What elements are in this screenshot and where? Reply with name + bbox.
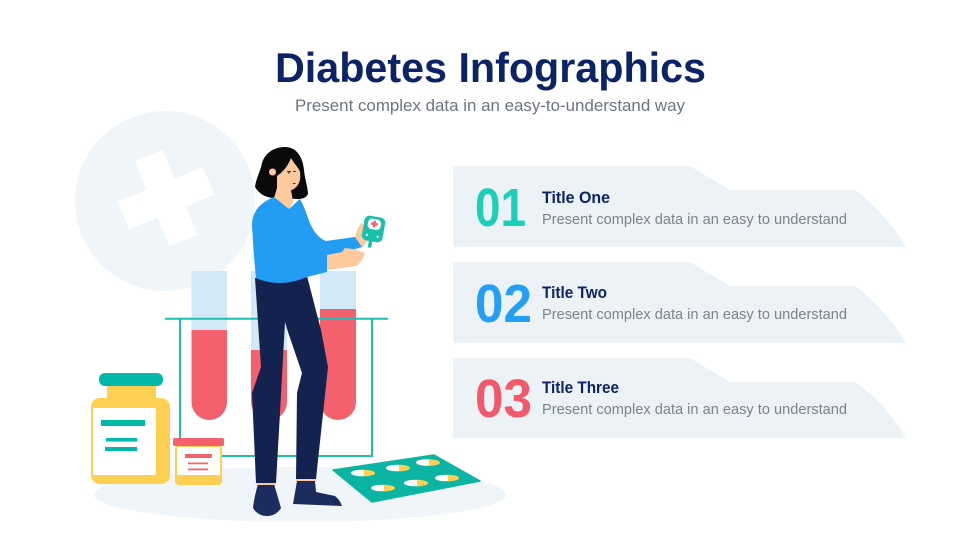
ankles: [257, 478, 316, 485]
illustration: woman testing blood sugar with medical items: [75, 111, 506, 522]
woman figure: [252, 147, 386, 516]
description: Present complex data in an easy to understand: [542, 402, 847, 418]
panel: item three: [453, 358, 906, 438]
blister pill pack: [333, 455, 480, 502]
large medicine jar: [91, 373, 170, 484]
eyes and mouth: [287, 171, 296, 184]
face and neck: [274, 158, 300, 210]
number 01: 01: [475, 178, 526, 238]
number 02: 02: [475, 274, 532, 334]
test tubes: [192, 271, 356, 420]
test tube rack: [165, 319, 388, 456]
heading: title two: Title Two: [542, 284, 607, 302]
title: Diabetes Infographics: [275, 44, 706, 91]
description: Present complex data in an easy to understand: [542, 307, 847, 323]
heading: title one: Title One: [542, 189, 610, 207]
panel: item one: [453, 166, 906, 247]
panel: item two: [453, 262, 906, 343]
shoes: [253, 481, 342, 516]
small medicine jar: [173, 438, 224, 485]
glucose meter: [360, 215, 386, 250]
number 03: 03: [475, 369, 532, 429]
hair: [255, 147, 308, 199]
ground shadow: [94, 467, 506, 522]
trousers: [252, 276, 328, 483]
back hand: [355, 222, 368, 248]
shirt: [252, 197, 362, 283]
description: Present complex data in an easy to understand: [542, 212, 847, 228]
background medical cross circle: [75, 111, 255, 291]
ear: [269, 168, 276, 176]
subtitle: Present complex data in an easy-to-understand way: [295, 96, 685, 115]
front hand: [327, 248, 365, 270]
heading: title three: Title Three: [542, 379, 619, 397]
